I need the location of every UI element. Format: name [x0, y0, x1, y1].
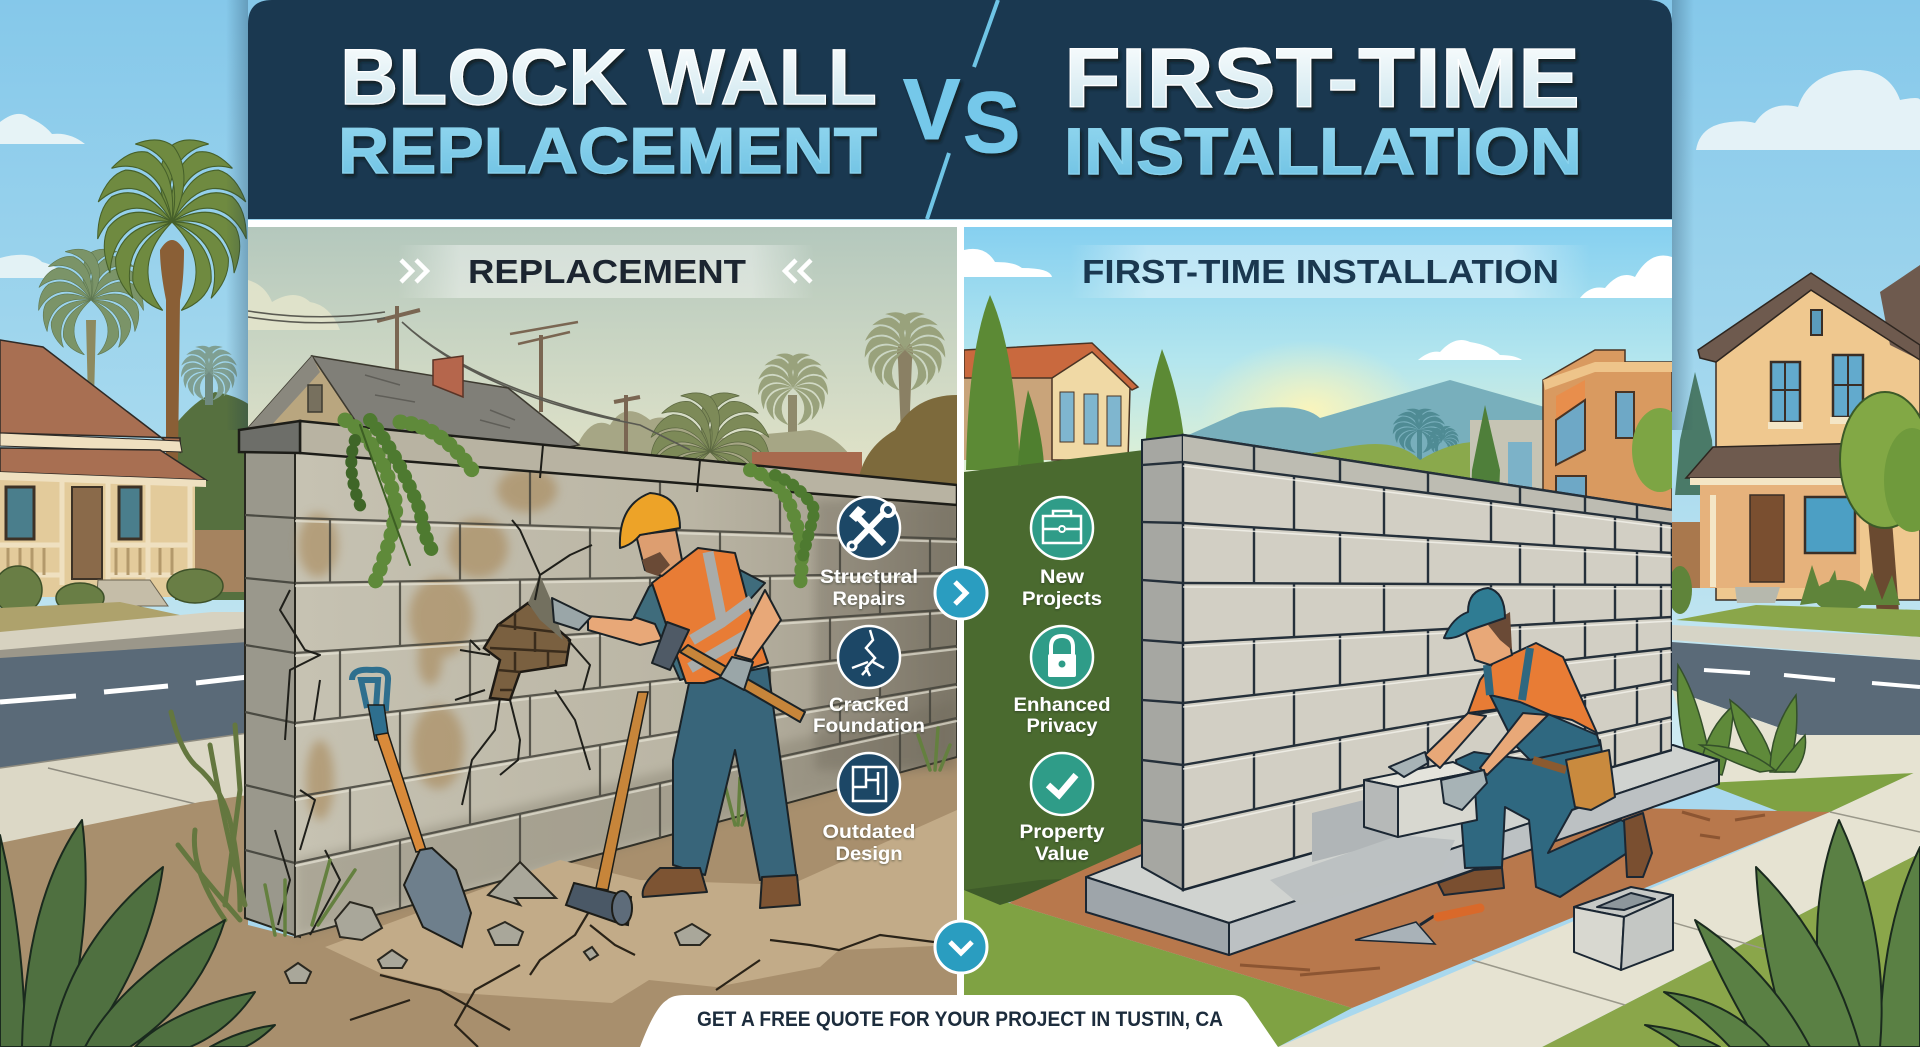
house: replacement background: [248, 354, 581, 446]
house: right: [1686, 265, 1920, 603]
panel: replacement: [171, 227, 957, 1047]
background trees: [175, 392, 250, 600]
worker glove: left: [552, 598, 591, 630]
green hedge panel: [964, 450, 1144, 905]
item: enhanced privacy: [1014, 626, 1110, 737]
ground: left: [0, 757, 957, 1047]
haze cloud: [248, 280, 340, 330]
concrete block being placed: [1364, 762, 1477, 837]
worker overalls bib: [1487, 648, 1600, 760]
worker arms: [1425, 713, 1486, 768]
worker sledgehammer: [652, 622, 805, 722]
plants: right curb: [1678, 665, 1806, 775]
sidewalk lower: left: [0, 733, 248, 846]
title: first-time: FIRST-TIME: [1064, 31, 1580, 125]
item: enhanced privacy: Enhanced: [1014, 695, 1110, 716]
wall icon-side shading: [815, 500, 957, 770]
panel sky: [248, 227, 957, 467]
wall end face: [1142, 435, 1183, 890]
palm tree: small distant: [177, 340, 241, 405]
wall cap: [239, 421, 957, 505]
panel heading: installation: FIRST-TIME INSTALLATION: [1082, 253, 1559, 290]
grey building: [1470, 420, 1542, 489]
block highlights: [295, 521, 957, 866]
cracked wall: [239, 420, 957, 937]
arrow: right: [935, 567, 987, 619]
plants: foreground right: [1645, 820, 1920, 1047]
item: cracked foundation: Cracked: [829, 695, 909, 716]
wall end pillar: [245, 450, 300, 937]
cypress trees: [966, 295, 1186, 470]
lawn: left: [0, 602, 212, 634]
trees: midground: [1312, 442, 1470, 478]
palm tree: low centre: [650, 392, 770, 464]
sidewalk upper: left: [0, 612, 248, 660]
item: new projects: [1022, 497, 1102, 610]
item: outdated design: [822, 753, 916, 865]
icon list: installation: [1014, 497, 1110, 865]
sidewalk: diagonal: [1278, 770, 1920, 1047]
grass strip: right: [1704, 773, 1915, 812]
mountains: [1189, 380, 1542, 459]
centre divider: [957, 227, 964, 997]
chevrons: left: [401, 260, 427, 282]
road: left: [0, 642, 248, 768]
left street scene: [0, 114, 957, 1047]
power lines: [248, 311, 690, 450]
cloud: right: [1696, 70, 1920, 150]
wall front face: [1183, 435, 1672, 890]
title: replacement: REPLACEMENT: [338, 114, 877, 187]
trowel: [1355, 908, 1480, 944]
item: property value: [1020, 753, 1105, 865]
sidewalk: right upper: [1672, 690, 1920, 800]
item: outdated design: Design: [836, 844, 902, 865]
clouds: [964, 249, 1672, 360]
tool belt: [1533, 750, 1615, 810]
curb: right: [1672, 625, 1920, 660]
palm tree: far: [32, 239, 150, 400]
block courses: [295, 460, 957, 908]
panel title band: installation: [1070, 245, 1590, 298]
utility poles: [377, 306, 640, 455]
worker glove: right: [720, 657, 753, 690]
cloud: left upper: [0, 114, 85, 144]
right street scene: [1278, 70, 1920, 1047]
call to action: GET A FREE QUOTE FOR YOUR PROJECT IN TUSTIN, CA: [697, 1008, 1223, 1031]
wall cracks: [275, 520, 592, 935]
block courses: [1142, 435, 1672, 858]
item: enhanced privacy: Privacy: [1026, 716, 1098, 737]
panel title band: replacement: [398, 245, 814, 298]
red roof building: [752, 452, 862, 474]
worker arm holding wall: [588, 608, 662, 645]
soil: [1009, 800, 1830, 1008]
item: cracked foundation: [813, 626, 925, 737]
tree: right: [1840, 392, 1920, 625]
orange building: [1542, 349, 1672, 509]
wall hole with exposed bricks: [484, 575, 570, 700]
block shadow: [1312, 800, 1398, 862]
olive bush: [860, 395, 957, 484]
divider slash: bottom: [927, 153, 949, 219]
vines: left: [345, 420, 472, 590]
worker boots: [1438, 813, 1652, 895]
pillar courses: [245, 515, 295, 863]
worker boots: [643, 868, 800, 908]
panel heading: replacement: REPLACEMENT: [468, 253, 746, 290]
house: left background: [964, 343, 1138, 460]
footing shadow: [1270, 835, 1455, 905]
item: outdated design: Outdated: [822, 822, 916, 843]
worker: installation: [1364, 588, 1652, 897]
white band under header: [248, 220, 1672, 227]
road markings: left: [0, 677, 248, 702]
item: new projects: New: [1040, 567, 1084, 588]
call to action: [640, 995, 1278, 1047]
worker head: [1465, 615, 1512, 665]
panel sky: [964, 227, 1672, 472]
house: left: [0, 340, 206, 606]
ground patch: left panel: [325, 810, 957, 1003]
lawn: bottom right: [1542, 853, 1920, 1047]
shovel: [352, 670, 471, 947]
cloud: left lower: [0, 255, 70, 278]
mountain palm silhouettes: [1392, 408, 1459, 460]
worker legs: [1456, 740, 1634, 897]
item: structural repairs: Repairs: [832, 589, 906, 610]
worker shirt: [634, 548, 765, 680]
cypress: right: [1675, 372, 1715, 495]
wall highlight lines: [1183, 466, 1672, 829]
new block wall: [1142, 435, 1672, 890]
background sky: [0, 0, 1920, 780]
sledgehammer on ground: [566, 692, 648, 925]
plants: foreground left: [0, 820, 275, 1047]
wall face: [295, 452, 957, 937]
title: vs: VS: [903, 62, 1020, 171]
chevrons: right: [785, 260, 811, 282]
road markings: right: [1704, 670, 1920, 687]
header banner: [248, 0, 1672, 219]
sun glow: [1218, 348, 1400, 420]
concrete footing: [1086, 745, 1719, 955]
worker legs: [673, 667, 797, 880]
worker shirt: [1468, 643, 1597, 733]
rocks: [285, 862, 710, 983]
worker: replacement: [552, 493, 805, 908]
wall stains: [298, 468, 557, 820]
title: block wall: BLOCK WALL: [340, 32, 877, 121]
wall grime: [295, 700, 957, 937]
divider slash: top: [974, 0, 998, 67]
title: installation: INSTALLATION: [1064, 114, 1582, 188]
wall top course: [1183, 435, 1672, 524]
hazy trees: [576, 411, 848, 464]
shrubs: left house: [0, 566, 223, 614]
fence: [195, 530, 250, 592]
worker gloves: [1389, 752, 1487, 810]
item: new projects: Projects: [1022, 589, 1102, 610]
item: structural repairs: Structural: [820, 567, 918, 588]
worker cap: [1444, 588, 1505, 638]
fence: right: [1672, 522, 1700, 588]
arrow: down: [935, 921, 987, 973]
tall weeds: [171, 712, 245, 920]
item: property value: Value: [1035, 844, 1089, 865]
item: cracked foundation: Foundation: [813, 716, 925, 737]
loose concrete block: [1574, 887, 1673, 970]
palm trees: distant: [758, 312, 946, 432]
worker arm: right: [735, 590, 781, 660]
small grass tufts: [265, 728, 950, 935]
worker beard: [642, 552, 670, 576]
vines: right: [750, 470, 815, 585]
header shadows: [226, 0, 1694, 430]
item: property value: Property: [1020, 822, 1105, 843]
worker vest: [652, 548, 768, 683]
grass: right panel: [964, 890, 1352, 1047]
palm tree: tall: [88, 123, 256, 460]
worker head: [636, 530, 682, 576]
ground cracks: [350, 910, 957, 1047]
panel: first-time installation: [964, 227, 1830, 1047]
road: right: [1672, 642, 1920, 735]
cypress: far right: [1472, 405, 1500, 482]
lawn: right: [1676, 605, 1920, 637]
worker hair: [1488, 612, 1512, 650]
shrubs: right house: [1668, 565, 1900, 614]
icon list: replacement: [813, 497, 925, 865]
item: structural repairs: [820, 497, 918, 610]
worker hard hat: [620, 493, 680, 548]
